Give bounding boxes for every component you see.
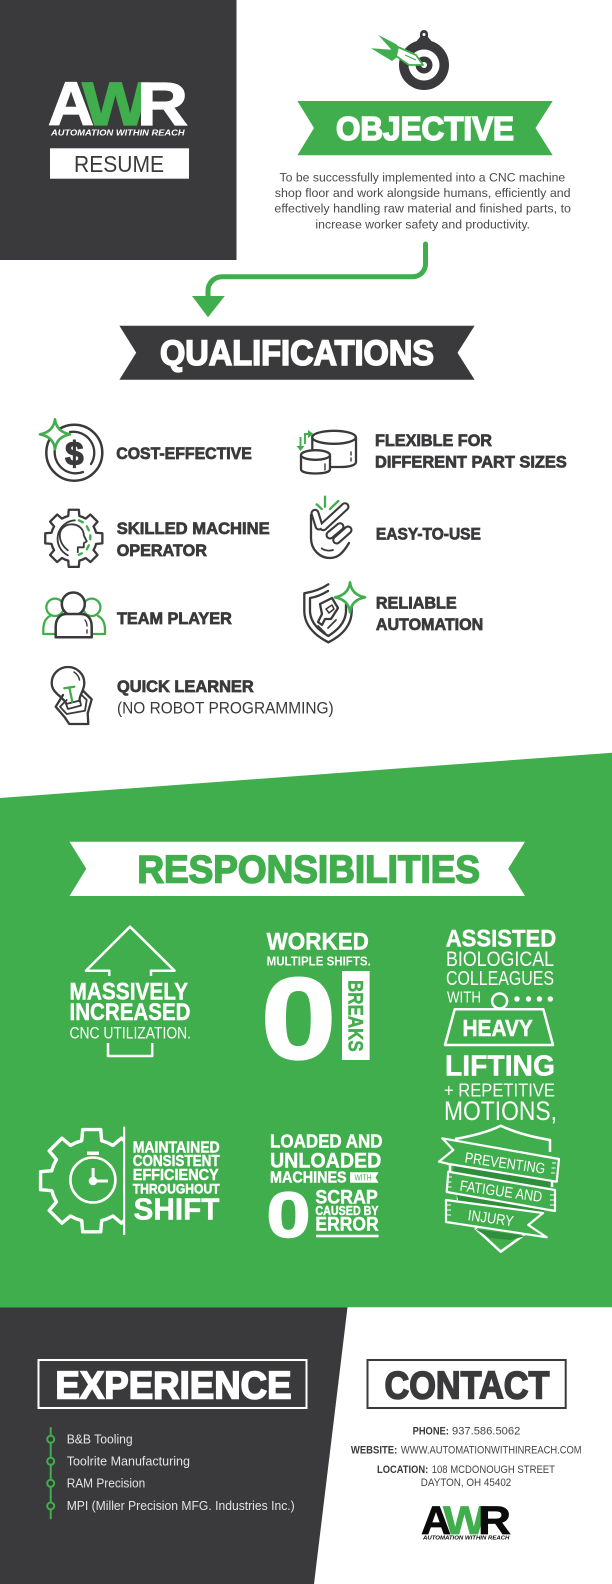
icon: coin: $: [65, 435, 83, 472]
text block: contact details: LOCATION:: [377, 1464, 428, 1476]
responsibility: zero scrap: LOADED AND: [270, 1131, 382, 1152]
label: [376, 594, 483, 634]
label: THROUGHOUT: [133, 1181, 220, 1196]
responsibility: assisted colleagues: + REPETITIVE: [444, 1080, 555, 1101]
icon: target with arrow: [371, 30, 449, 90]
qualification: cost-effective: COST-EFFECTIVE: [116, 444, 252, 463]
responsibility: zero scrap: SCRAP: [315, 1186, 378, 1208]
responsibility: assisted colleagues: WITH: [447, 990, 481, 1007]
text block: contact details: [351, 1425, 582, 1489]
qualification: team player: [43, 592, 232, 637]
responsibility: zero scrap: ERROR: [315, 1214, 379, 1236]
heading: responsibilities ribbon: RESPONSIBILITIES: [137, 849, 480, 892]
icon: cylinders: [296, 430, 356, 474]
ribbon: preventing: PREVENTING: [464, 1150, 546, 1178]
label: [70, 978, 191, 1042]
label: (NO ROBOT PROGRAMMING): [117, 698, 334, 718]
icon: team: [43, 592, 105, 637]
text block: objective: effectively handling raw material and finished parts, to: [274, 202, 571, 216]
icon: weight: HEAVY: [462, 1015, 533, 1041]
list: experience timeline: [47, 1427, 295, 1519]
logo: AWR: A: [48, 70, 94, 138]
logo: AWR black: [421, 1499, 511, 1543]
text block: contact details: DAYTON, OH 45402: [421, 1477, 511, 1489]
logo: AWR black: A: [421, 1499, 451, 1543]
text block: objective: increase worker safety and productivity.: [315, 217, 530, 231]
text block: contact details: PHONE:: [413, 1425, 449, 1437]
resume label: [50, 148, 189, 179]
panel: header with logo: [0, 0, 236, 260]
responsibility: zero scrap: CAUSED BY: [315, 1203, 379, 1218]
qualification: easy-to-use: [311, 497, 481, 558]
breaks tag: [342, 971, 370, 1060]
resume label: RESUME: [74, 151, 164, 177]
icon: up arrow outline: [86, 927, 174, 1056]
icon: shield with ribbons: [439, 1126, 559, 1252]
responsibility: assisted colleagues: COLLEAGUES: [446, 968, 554, 990]
label: [117, 519, 270, 560]
heading: responsibilities ribbon: [70, 842, 525, 896]
list: experience timeline: RAM Precision: [67, 1476, 145, 1491]
label: [133, 1139, 220, 1226]
icon: light bulb in hand: [52, 667, 92, 724]
list: experience timeline: MPI (Miller Precision MFG. Industries Inc.): [67, 1498, 295, 1513]
text block: objective: shop floor and work alongside humans, efficiently and: [275, 186, 571, 200]
text block: contact details: WEBSITE:: [351, 1445, 397, 1457]
big zero: 0: [261, 954, 336, 1084]
label: CNC UTILIZATION.: [70, 1023, 191, 1042]
responsibility: zero scrap: [266, 1131, 382, 1251]
responsibility: utilization arrow: [70, 927, 191, 1056]
icon: gear with stopwatch: [38, 1126, 126, 1235]
label: FLEXIBLE FOR: [375, 431, 492, 450]
qualification: team player: TEAM PLAYER: [117, 609, 232, 628]
logo tagline: AUTOMATION WITHIN REACH: [50, 128, 185, 138]
icon: coin: [40, 419, 102, 481]
ribbon: injury: INJURY: [467, 1207, 515, 1230]
responsibility: assisted colleagues: LIFTING: [445, 1050, 555, 1082]
text block: contact details: 108 MCDONOUGH STREET: [432, 1464, 555, 1476]
qualification: cost-effective: [40, 419, 252, 481]
qualification: quick learner: [52, 667, 334, 724]
logo: AWR: R: [137, 70, 188, 138]
label: QUICK LEARNER: [117, 677, 254, 696]
responsibility: zero breaks: [261, 928, 371, 1084]
label: CONSISTENT: [133, 1153, 220, 1170]
logo: AWR black: W: [443, 1499, 486, 1543]
label: [375, 431, 567, 472]
label: SKILLED MACHINE: [117, 519, 270, 538]
heading: objective ribbon: OBJECTIVE: [336, 110, 514, 147]
qualification: reliable automation: [304, 582, 483, 642]
text block: contact details: 937.586.5062: [452, 1425, 520, 1437]
label: INCREASED: [70, 999, 190, 1026]
qualification: skilled machine operator: [45, 510, 270, 567]
responsibility: zero breaks: WORKED: [267, 928, 369, 955]
logo: AWR black: AUTOMATION WITHIN REACH: [422, 1536, 511, 1542]
ribbon: fatigue and: FATIGUE AND: [459, 1178, 543, 1206]
responsibility: assisted colleagues: BIOLOGICAL: [446, 948, 554, 971]
qualification: flexible: [296, 430, 567, 474]
breaks tag: BREAKS: [343, 980, 366, 1052]
icon: gear with head: [45, 510, 102, 567]
logo: AWR: [48, 70, 188, 138]
logo: AWR: W: [82, 70, 149, 138]
big zero: 0: [266, 1179, 310, 1251]
heading: contact: CONTACT: [384, 1364, 550, 1407]
label: SHIFT: [134, 1192, 220, 1226]
heading: qualifications ribbon: QUALIFICATIONS: [160, 334, 434, 373]
logo: AWR black: R: [478, 1499, 511, 1543]
heading: qualifications ribbon: [119, 326, 475, 380]
label: AUTOMATION: [376, 615, 483, 634]
qualification: easy-to-use: EASY-TO-USE: [376, 524, 481, 544]
heading: experience: EXPERIENCE: [55, 1364, 292, 1407]
panel: responsibilities background: [0, 753, 612, 1307]
text block: objective: To be successfully implemented into a CNC machine: [280, 170, 565, 184]
list: experience timeline: B&B Tooling: [67, 1432, 133, 1447]
label: EFFICIENCY: [133, 1167, 219, 1184]
arrow: objective to qualifications: [192, 244, 426, 317]
label: MASSIVELY: [70, 978, 188, 1005]
icon: weight: [445, 994, 553, 1045]
text block: objective: [274, 170, 571, 231]
icon: finger snap hand: [311, 497, 349, 558]
label: OPERATOR: [117, 541, 207, 560]
responsibility: assisted colleagues: ASSISTED: [446, 926, 556, 953]
text block: contact details: WWW.AUTOMATIONWITHINREACH.COM: [401, 1445, 582, 1457]
label: [117, 677, 334, 718]
with tag: WITH: [354, 1174, 372, 1182]
responsibility: zero scrap: MACHINES: [270, 1170, 347, 1187]
label: RELIABLE: [376, 594, 457, 612]
panel: experience background: [0, 1307, 348, 1584]
label: MAINTAINED: [133, 1139, 220, 1156]
icon: shield with robot arm: [304, 582, 365, 642]
responsibility: assisted colleagues: [444, 926, 557, 1126]
responsibility: zero scrap: UNLOADED: [270, 1150, 381, 1173]
responsibility: assisted colleagues: MOTIONS,: [444, 1096, 557, 1126]
list: experience timeline: Toolrite Manufacturing: [67, 1454, 190, 1469]
responsibility: zero breaks: MULTIPLE SHIFTS.: [267, 954, 371, 968]
label: DIFFERENT PART SIZES: [375, 452, 567, 472]
heading: objective ribbon: [297, 101, 553, 155]
responsibility: consistent efficiency: [41, 1127, 220, 1235]
